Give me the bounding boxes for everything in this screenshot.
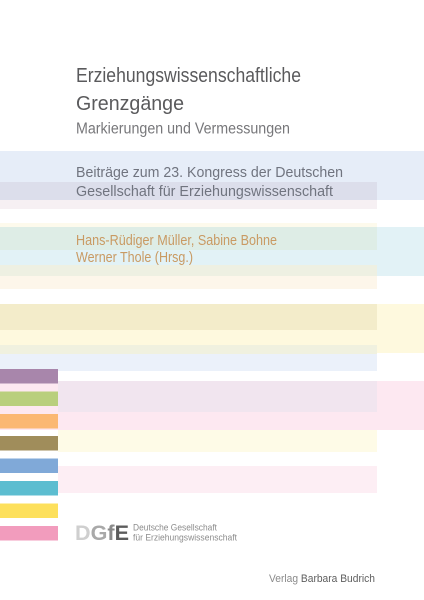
congress description: Gesellschaft für Erziehungswissenschaft (76, 183, 334, 200)
editors (76, 233, 277, 266)
colour band group: top blue (0, 151, 424, 209)
colour band group: teal and cream (0, 223, 424, 289)
congress description: Beiträge zum 23. Kongress der Deutschen (76, 164, 343, 181)
colour band group: pink and pale yellow (0, 381, 424, 493)
colour band group: yellow and light blue (0, 304, 424, 371)
DGfE logo: Deutsche Gesellschaft (133, 522, 217, 532)
publisher: Verlag Barbara Budrich (269, 573, 375, 585)
title: Grenzgänge (76, 93, 184, 115)
DGfE logo (75, 522, 237, 545)
editors: Werner Thole (Hrsg.) (76, 250, 193, 266)
title: Erziehungswissenschaftliche (76, 65, 301, 87)
DGfE logo: DGfE (75, 522, 129, 545)
title (76, 65, 301, 115)
subtitle: Markierungen und Vermessungen (76, 120, 290, 138)
congress description (76, 164, 343, 200)
editors: Hans-Rüdiger Müller, Sabine Bohne (76, 233, 277, 249)
colour swatches column (0, 369, 58, 540)
DGfE logo: für Erziehungswissenschaft (133, 532, 237, 542)
